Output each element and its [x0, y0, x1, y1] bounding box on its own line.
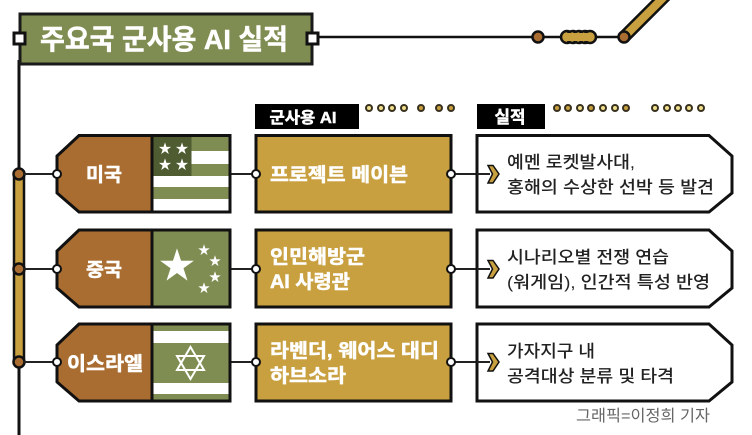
column heading: military AI — [255, 104, 359, 129]
dots decoration — [366, 105, 704, 111]
flag: USA: ★ — [158, 141, 172, 156]
row: United States — [53, 136, 732, 212]
flag: China — [152, 230, 230, 307]
result box: Israel: 가자지구 내 — [507, 342, 595, 361]
title banner: 주요국 군사용 AI 실적 — [40, 24, 288, 55]
program box: PLA AI commander — [252, 230, 455, 307]
country tag: Israel: 이스라엘 — [67, 353, 143, 375]
flag: China: ★ — [209, 270, 221, 284]
title banner — [14, 14, 318, 64]
result box: China: (워게임), 인간적 특성 반영 — [507, 273, 710, 292]
flag: USA — [152, 136, 230, 212]
top connector line — [312, 36, 624, 38]
program box: Lavender, Where's Daddy, Habsora — [252, 324, 455, 401]
row: China — [53, 230, 732, 307]
flag: China: ★ — [209, 254, 221, 268]
flag: USA: ★ — [158, 157, 172, 172]
program box: Lavender, Where's Daddy, Habsora: 하브소라 — [270, 365, 347, 387]
flag: China: ★ — [198, 281, 210, 295]
left vertical pipe — [14, 168, 24, 368]
program box: Project Maven — [252, 136, 455, 212]
result box: China: 시나리오별 전쟁 연습 — [507, 248, 669, 267]
program box: PLA AI commander: AI 사령관 — [270, 271, 350, 293]
program box: Project Maven: 프로젝트 메이븐 — [270, 164, 408, 186]
result box: China — [477, 230, 732, 307]
country tag: China — [57, 230, 152, 307]
country tag: USA: 미국 — [86, 164, 122, 186]
flag: China: ★ — [198, 243, 210, 257]
top right pipe decoration — [532, 0, 672, 43]
column heading: results — [477, 104, 545, 129]
node — [53, 170, 61, 178]
node — [53, 358, 61, 366]
flag: USA: ★ — [175, 157, 189, 172]
program box: PLA AI commander: 인민해방군 — [270, 246, 365, 268]
result box: USA — [477, 136, 732, 212]
country tag: Israel — [57, 324, 152, 401]
connector lines — [24, 174, 490, 362]
flag: USA: ★ — [175, 141, 189, 156]
credit: 그래픽=이정희 기자 — [576, 407, 710, 425]
flag: China: ★ — [159, 245, 195, 286]
result box: Israel — [477, 324, 732, 401]
result box: USA: 예멘 로켓발사대, — [507, 153, 635, 172]
country tag: China: 중국 — [86, 260, 122, 281]
country tag: USA — [57, 136, 152, 212]
result box: USA: 홍해의 수상한 선박 등 발견 — [507, 178, 714, 197]
column heading: military AI: 군사용 AI — [270, 109, 336, 127]
program box: Lavender, Where's Daddy, Habsora: 라벤더, 웨어스 대디 — [270, 340, 439, 362]
main vertical line — [18, 60, 20, 435]
node — [53, 265, 61, 273]
row: Israel — [53, 324, 732, 401]
flag: Israel — [152, 324, 230, 401]
column heading: results: 실적 — [494, 108, 526, 127]
result box: Israel: 공격대상 분류 및 타격 — [507, 367, 674, 386]
